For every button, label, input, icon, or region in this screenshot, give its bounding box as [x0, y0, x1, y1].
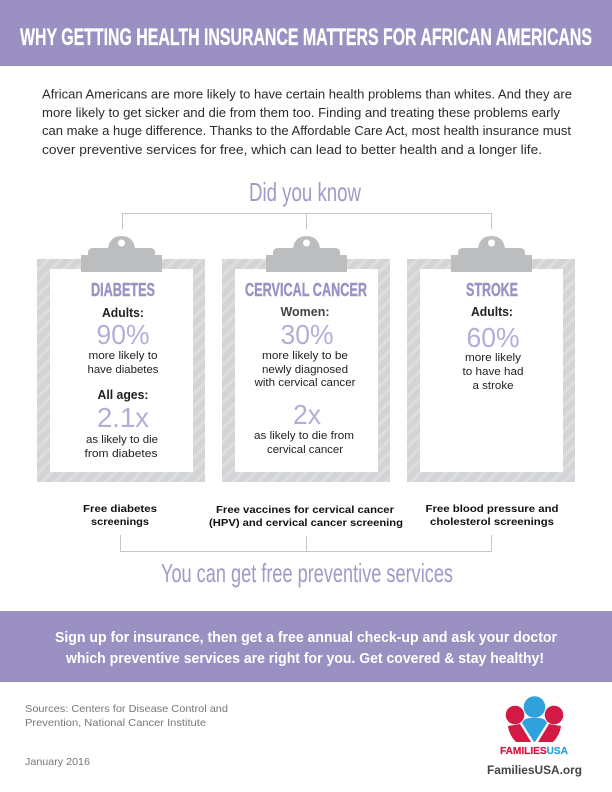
cervical cancer women stats: newly diagnosed	[262, 364, 348, 376]
free services: stroke	[426, 503, 558, 528]
cervical cancer women stats: 30%	[280, 319, 334, 350]
icon: stroke clip	[451, 236, 532, 272]
diabetes all ages stats: from diabetes	[84, 448, 158, 460]
icon: family figures	[506, 696, 563, 742]
call to action banner: Sign up for insurance, then get a free annual check-up and ask your doctor	[55, 630, 557, 646]
icon: cervical cancer clip	[266, 236, 347, 272]
bottom bracket connector	[120, 535, 492, 552]
diabetes all ages stats: 2.1x	[97, 402, 149, 433]
diabetes adults stats: Adults:	[102, 306, 144, 320]
stroke adults stats: to have had	[462, 366, 524, 378]
heading: diabetes: DIABETES	[91, 280, 155, 300]
cervical cancer mortality stats: cervical cancer	[267, 444, 343, 456]
logo: Families USA	[487, 696, 582, 777]
icon: diabetes clip	[81, 236, 162, 272]
diabetes adults stats	[88, 306, 159, 376]
title banner	[0, 0, 612, 66]
sources	[25, 703, 228, 729]
call to action banner: which preventive services are right for you. Get covered & stay healthy!	[65, 651, 544, 667]
free services: diabetes	[83, 503, 157, 528]
panel: cervical cancer clipboard	[222, 236, 390, 482]
cervical cancer women stats: with cervical cancer	[253, 377, 356, 389]
heading: stroke: STROKE	[466, 280, 518, 300]
free services: cervical cancer	[209, 504, 403, 529]
diabetes all ages stats: All ages:	[98, 388, 148, 402]
free services: diabetes: screenings	[91, 516, 149, 528]
intro paragraph: more likely to get sicker and die from them too. Finding and treating these problems early	[42, 106, 561, 120]
stroke adults stats: more likely	[465, 352, 521, 364]
diabetes adults stats: more likely to	[88, 350, 158, 362]
cervical cancer women stats: Women:	[280, 305, 330, 319]
free services: cervical cancer: (HPV) and cervical cancer screening	[209, 517, 403, 529]
intro paragraph: cover preventive services for free, which can lead to better health and a longer life.	[42, 143, 542, 157]
diabetes adults stats: 90%	[96, 319, 150, 350]
stroke adults stats	[462, 305, 524, 392]
cervical cancer women stats: more likely to be	[262, 350, 348, 362]
panel: diabetes clipboard	[37, 236, 205, 482]
heading: cervical cancer: CERVICAL CANCER	[245, 280, 367, 300]
cervical cancer mortality stats	[254, 399, 354, 456]
cervical cancer mortality stats: as likely to die from	[254, 430, 354, 442]
cervical cancer mortality stats: 2x	[293, 399, 321, 430]
top bracket connector	[122, 214, 492, 229]
stroke adults stats: Adults:	[471, 305, 513, 319]
date: January 2016	[25, 756, 90, 768]
free services: stroke: cholesterol screenings	[430, 516, 554, 528]
intro paragraph	[42, 88, 572, 157]
logo wordmark: FAMILIESUSA	[500, 746, 568, 757]
stroke adults stats: a stroke	[472, 380, 514, 392]
panel: stroke clipboard	[407, 236, 575, 482]
diabetes adults stats: have diabetes	[88, 364, 159, 376]
intro paragraph: can make a huge difference. Thanks to the Affordable Care Act, most health insurance must	[42, 124, 572, 138]
logo url: FamiliesUSA.org	[487, 765, 582, 777]
free services: stroke: Free blood pressure and	[426, 503, 558, 515]
free services: diabetes: Free diabetes	[83, 503, 157, 515]
sources: Sources: Centers for Disease Control and	[25, 703, 228, 715]
call to action banner	[0, 611, 612, 682]
diabetes all ages stats: as likely to die	[86, 434, 158, 446]
stroke adults stats: 60%	[466, 322, 520, 353]
diabetes all ages stats	[84, 388, 158, 460]
sources: Prevention, National Cancer Institute	[25, 717, 206, 729]
heading: did you know: Did you know	[249, 177, 361, 207]
intro paragraph: African Americans are more likely to have certain health problems than whites. And they are	[42, 88, 572, 102]
free services: cervical cancer: Free vaccines for cervical cancer	[216, 504, 394, 516]
cervical cancer women stats	[253, 305, 356, 389]
heading: you can get free preventive services: You can get free preventive services	[161, 558, 453, 588]
